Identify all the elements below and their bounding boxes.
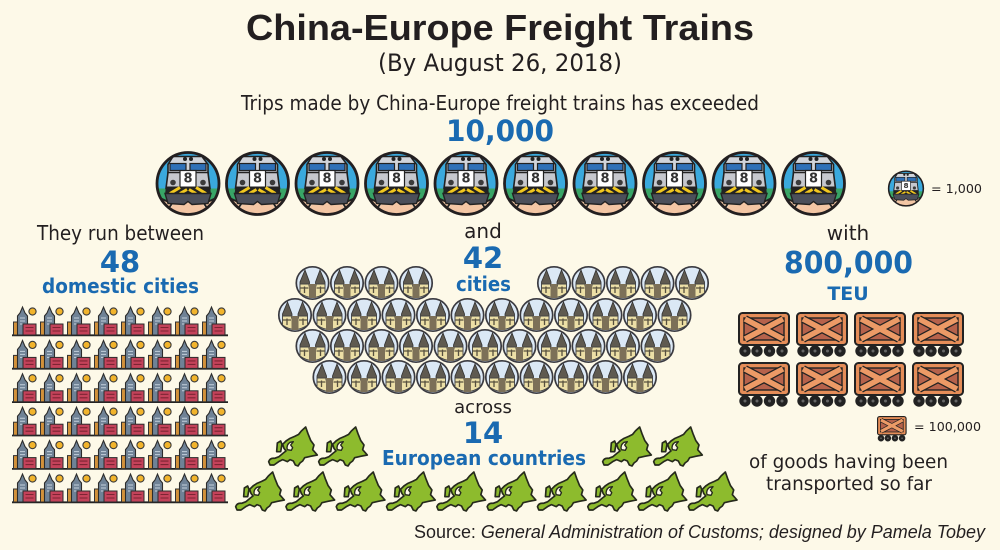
text: across: across	[454, 397, 512, 418]
pictogram row: trains	[156, 152, 846, 216]
subtitle: date: (By August 26, 2018)	[378, 49, 622, 77]
legend: train = 1,000: = 1,000	[931, 182, 982, 196]
pictogram: European countries maps	[236, 427, 737, 511]
pictogram grid: freight cars	[739, 313, 963, 407]
legend: car = 100,000: = 100,000	[914, 419, 981, 434]
label: TEU: TEU	[827, 283, 869, 305]
label: domestic cities: domestic cities	[42, 274, 199, 298]
stat: 48: 48	[100, 245, 140, 279]
text: goods transported: of goods having been	[749, 451, 948, 473]
text: they run between: They run between	[36, 221, 204, 245]
text: and: and	[464, 219, 502, 243]
pictogram grid: domestic cities	[12, 307, 228, 502]
text: goods transported	[749, 451, 948, 495]
text: trips intro: Trips made by China-Europe freight trains has exceeded	[240, 91, 759, 115]
pictogram cluster: European cities	[279, 267, 708, 393]
label: cities: cities	[456, 272, 511, 296]
legend: train = 1,000	[888, 171, 982, 206]
stat: 800,000: 800,000	[784, 246, 913, 281]
stat: 14: 14	[463, 416, 503, 450]
source credit: Source: General Administration of Customs; designed by Pamela Tobey	[414, 522, 986, 542]
legend: car = 100,000	[878, 417, 981, 441]
text: goods transported: transported so far	[766, 473, 932, 495]
stat: 42: 42	[463, 241, 503, 275]
stat: 10,000 trips: 10,000	[446, 114, 554, 148]
label: European countries: European countries	[382, 446, 586, 470]
text: with: with	[827, 221, 869, 245]
title: China-Europe Freight Trains	[246, 7, 754, 48]
